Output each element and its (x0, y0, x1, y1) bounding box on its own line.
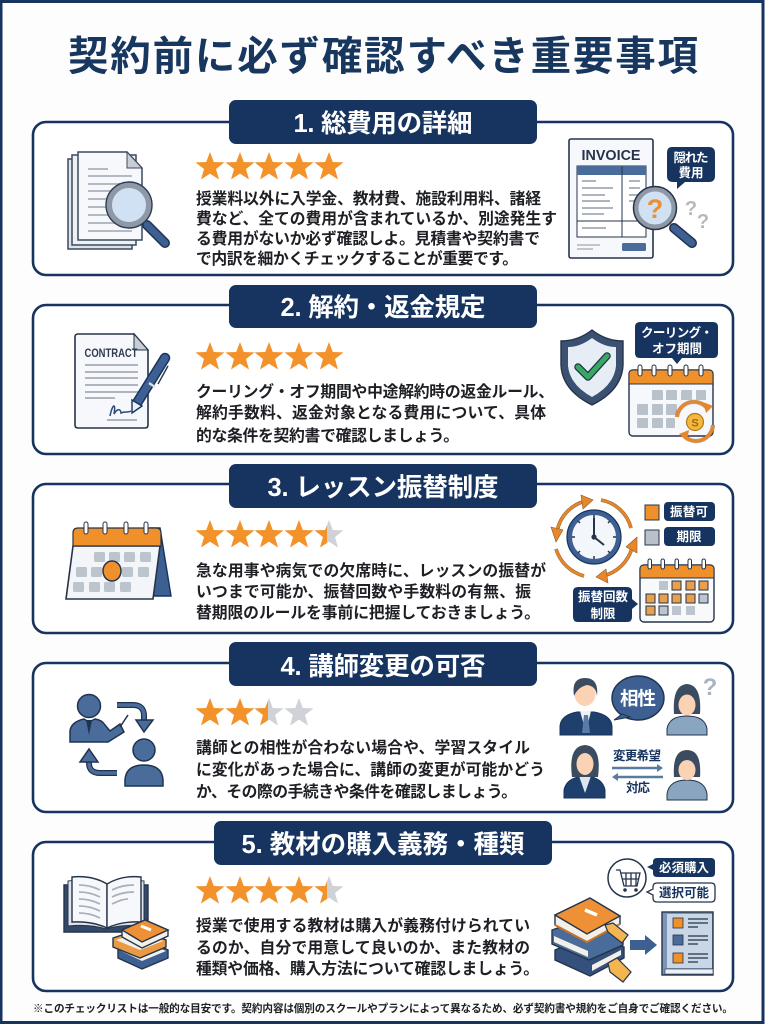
panel: 3 lesson rescheduling (33, 464, 733, 633)
icon: teacher and student compatibility: ? (703, 674, 717, 701)
text block: 授業で使用する教材は購入が義務付けられてい (196, 916, 530, 935)
icon: contract and pen (75, 334, 168, 428)
icon: calendar with refund coin: S (691, 418, 699, 430)
icon: invoice with hidden costs (569, 139, 715, 258)
label: optional choice (647, 883, 715, 902)
icon: invoice with hidden costs: INVOICE (582, 148, 641, 164)
icon: documents with magnifier (68, 152, 165, 249)
text block: 急な用事や病気での欠席時に、レッスンの振替が (196, 561, 546, 580)
heading: 1: 1. 総費用の詳細 (294, 110, 472, 138)
text block: 的な条件を契約書で確認しましょう。 (196, 426, 459, 445)
callout: cooling-off: オフ期間 (652, 342, 702, 356)
callout: reschedule count limit (573, 587, 638, 622)
icon: invoice with hidden costs: 隠れた (674, 151, 708, 165)
text block (196, 189, 557, 268)
icon: shield with check (561, 330, 623, 405)
text block: か、その際の手続きや条件を確認しましょう。 (196, 782, 517, 801)
text block (196, 738, 545, 801)
text block: いつまで可能か、振替回数や手数料の有無、振 (196, 582, 531, 601)
icon: invoice with hidden costs: 費用 (678, 165, 704, 180)
icon: shopping cart (608, 859, 646, 897)
heading: 3 (229, 464, 537, 508)
icon: invoice with hidden costs: ? (697, 211, 709, 233)
text block (196, 561, 546, 622)
icon: teacher and student compatibility: 変更希望 (613, 748, 661, 763)
text block: る費用がないか必ず確認しよ。見積書や契約書で (196, 229, 540, 248)
rating: 4.5 stars (196, 520, 344, 548)
heading: 2 (229, 285, 537, 328)
label: required purchase: 必須購入 (659, 860, 709, 875)
icon: teacher and student compatibility (560, 674, 717, 800)
callout: cooling-off (635, 322, 718, 364)
callout: cooling-off: クーリング・ (641, 325, 713, 340)
icon: teacher and student compatibility: 対応 (626, 780, 650, 795)
arrow (630, 935, 657, 955)
heading: 5 (214, 821, 552, 865)
heading: 5: 5. 教材の購入義務・種類 (242, 831, 525, 859)
title: 契約前に必ず確認すべき重要事項 (68, 33, 698, 79)
legend: reschedule available: 振替可 (670, 504, 708, 519)
rating: 5 stars (196, 342, 344, 370)
icon: teacher and student cycle (70, 694, 163, 786)
panel: 4 teacher change (33, 642, 733, 812)
icon: catalog book (662, 912, 713, 975)
icon: clock with cycle arrows (551, 495, 637, 583)
legend: deadline (645, 527, 715, 546)
icon: invoice with hidden costs: ? (685, 198, 697, 220)
text block (196, 382, 554, 445)
heading: 2: 2. 解約・返金規定 (280, 294, 486, 322)
panel: 2 cancellation and refund (33, 285, 733, 454)
text block: 費など、全ての費用が含まれているか、別途発生す (196, 209, 557, 228)
label: required purchase (647, 858, 715, 877)
heading: 3: 3. レッスン振替制度 (268, 474, 498, 502)
panel: 5 textbook obligation (33, 821, 733, 991)
text block: に変化があった場合に、講師の変更が可能かどう (196, 760, 545, 779)
heading: 1 (229, 100, 537, 144)
text block: クーリング・オフ期間や中途解約時の返金ルール、 (196, 382, 554, 401)
legend: deadline: 期限 (676, 530, 702, 544)
icon: schedule calendar (640, 559, 714, 622)
heading: 4 (229, 642, 537, 686)
text block: るのか、自分で用意して良いのか、また教材の (196, 938, 530, 957)
icon: contract and pen: CONTRACT (84, 348, 138, 360)
text block: で内訳を細かくチェックすることが重要です。 (196, 249, 518, 268)
callout: reschedule count limit: 振替回数 (578, 589, 628, 604)
text block: 講師との相性が合わない場合や、学習スタイル (196, 738, 530, 757)
icon: teacher and student compatibility: 相性 (620, 688, 656, 709)
text block: 授業料以外に入学金、教材費、施設利用料、諸経 (196, 189, 541, 208)
icon: book stack with tags (552, 898, 631, 982)
legend: reschedule available (645, 502, 715, 521)
text block: 種類や価格、購入方法について確認しましょう。 (196, 959, 539, 978)
footnote: ※このチェックリストは一般的な目安です。契約内容は個別のスクールやプランによって異なるため、必ず契約書や規約をご自身でご確認ください。 (33, 1002, 733, 1015)
rating: 5 stars (196, 152, 344, 180)
label: optional choice: 選択可能 (659, 885, 709, 900)
icon: calendar with refund coin (629, 365, 713, 441)
icon: invoice with hidden costs: ? (647, 194, 663, 224)
icon: desk calendar (66, 522, 171, 599)
rating: 4.5 stars (196, 876, 344, 904)
text block (196, 916, 539, 978)
callout: reschedule count limit: 制限 (590, 607, 616, 621)
heading: 4: 4. 講師変更の可否 (280, 653, 486, 681)
text block: 替期限のルールを事前に把握しておきましょう。 (196, 603, 540, 622)
icon: open book and stack (64, 877, 168, 969)
rating: 2.5 stars (196, 698, 314, 726)
text block: 解約手数料、返金対象となる費用について、具体 (196, 403, 546, 422)
panel: 1 total cost (33, 100, 733, 275)
